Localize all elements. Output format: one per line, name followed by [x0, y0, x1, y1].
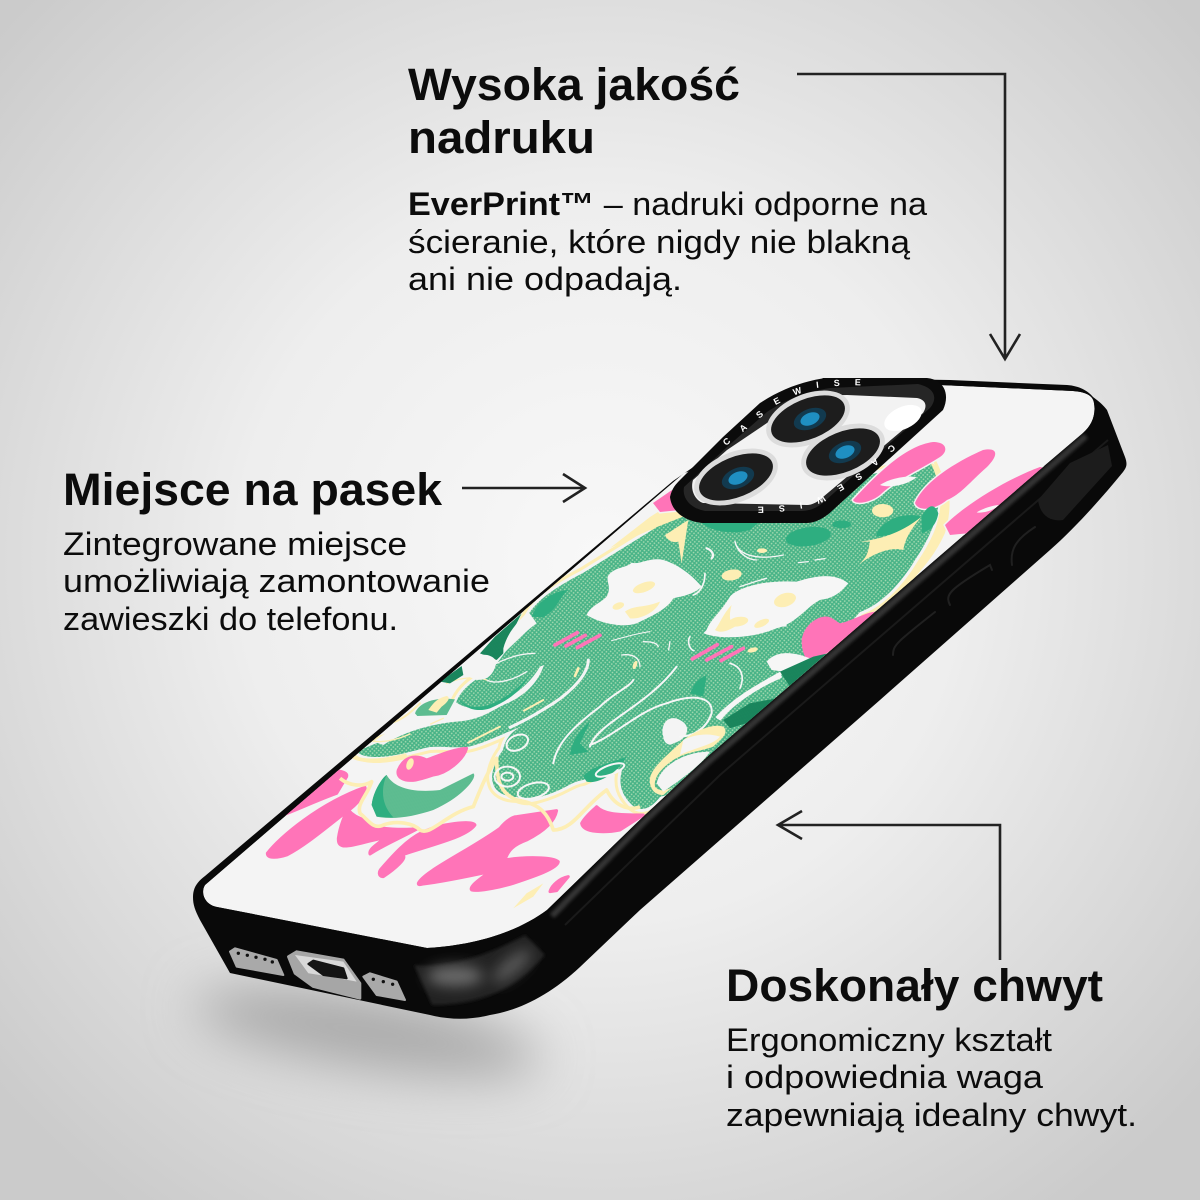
- white swirl lines: [553, 542, 780, 763]
- upper hook green: [415, 699, 455, 716]
- lens top: [758, 379, 858, 459]
- thin white line: [487, 653, 535, 682]
- ring top bevel: [684, 384, 934, 511]
- body text: ani nie odpadają.: [408, 261, 682, 297]
- green body with dotted print: [357, 462, 939, 809]
- arrow down to phone: [797, 74, 1020, 359]
- heading: Wysoka jakość: [408, 59, 740, 110]
- body text: Zintegrowane miejsce: [63, 526, 407, 562]
- cream highlights: [368, 668, 578, 743]
- glossy corner base: [414, 935, 545, 1005]
- case body: [193, 378, 1126, 1019]
- white band between tentacles: [373, 665, 544, 745]
- printed back panel: [203, 385, 1095, 948]
- cream shapes: [610, 464, 950, 598]
- body text: zapewniają idealny chwyt.: [726, 1097, 1137, 1133]
- right skull: [703, 576, 848, 637]
- body text: EverPrint™ – nadruki odporne na: [408, 186, 927, 222]
- body text: zawieszki do telefonu.: [63, 601, 398, 637]
- skull details: [612, 520, 770, 670]
- cream wiggle outlines: [340, 755, 640, 831]
- callout: print quality: [408, 59, 1020, 359]
- heading: nadruku: [408, 112, 595, 163]
- body text: [726, 1022, 1137, 1133]
- lens left: [686, 437, 786, 517]
- heart: [802, 612, 875, 658]
- upper hook cream: [428, 696, 449, 713]
- body text: ścieranie, które nigdy nie blakną: [408, 224, 910, 260]
- side buttons: [893, 527, 1035, 655]
- camera ring: [670, 378, 946, 523]
- charging port: [288, 952, 360, 998]
- top right details: [703, 477, 1000, 718]
- white tentacle edge: [510, 660, 588, 727]
- body text: [63, 526, 490, 637]
- body text: Ergonomiczny kształt: [726, 1022, 1052, 1058]
- phone floating shadow: [190, 969, 546, 1095]
- lower right cream lobe: [650, 726, 726, 795]
- heading: Miejsce na pasek: [63, 464, 443, 515]
- phone case illustration: [193, 378, 1126, 1019]
- white highlights on pink: [880, 477, 917, 486]
- right skull start: [706, 582, 787, 630]
- body text: umożliwiają zamontowanie: [63, 563, 490, 599]
- pink dash marks: [555, 633, 743, 661]
- flash: [880, 400, 926, 436]
- speaker left: [230, 948, 283, 975]
- glass opening: [692, 395, 925, 505]
- rim bevel along print edge: [552, 436, 1086, 916]
- rim lettering bottom: CASEWISE: [758, 445, 895, 513]
- glossy corner highlights: [427, 944, 536, 988]
- lower left green hook: [372, 773, 474, 818]
- camera bump: [670, 378, 946, 523]
- speaker right: [363, 973, 405, 1000]
- small cream sparkle: [513, 883, 543, 908]
- bottom ports: [230, 948, 405, 1000]
- pink bottom lettering and heart: [267, 748, 643, 908]
- callout: grip: [726, 811, 1137, 1133]
- lens right: [793, 412, 893, 492]
- rim lettering top: CASEWISE: [723, 379, 860, 445]
- body text: [408, 186, 927, 297]
- left skull: [587, 559, 702, 625]
- side button: strap slot: [1038, 445, 1112, 520]
- dark green swooshes: [532, 522, 760, 782]
- left tentacles detail: [340, 653, 640, 831]
- cream outline layers: [357, 462, 939, 809]
- dark swoosh: [458, 673, 530, 710]
- curl swirls: [495, 731, 626, 802]
- arrow left: [778, 811, 1000, 960]
- arrow right: [462, 474, 585, 502]
- side rim line: [565, 440, 1108, 925]
- dark green wedge: [780, 653, 828, 687]
- details in centre of print: [440, 520, 787, 802]
- heading: Doskonały chwyt: [726, 960, 1103, 1011]
- callout: strap slot: [63, 464, 585, 637]
- pink lettering top: [653, 442, 1060, 535]
- body text: i odpowiednia waga: [726, 1059, 1043, 1095]
- white under heart: [717, 653, 810, 718]
- heading: [408, 59, 740, 163]
- dark edge patches: [440, 613, 777, 728]
- white clouds on left: [463, 612, 687, 745]
